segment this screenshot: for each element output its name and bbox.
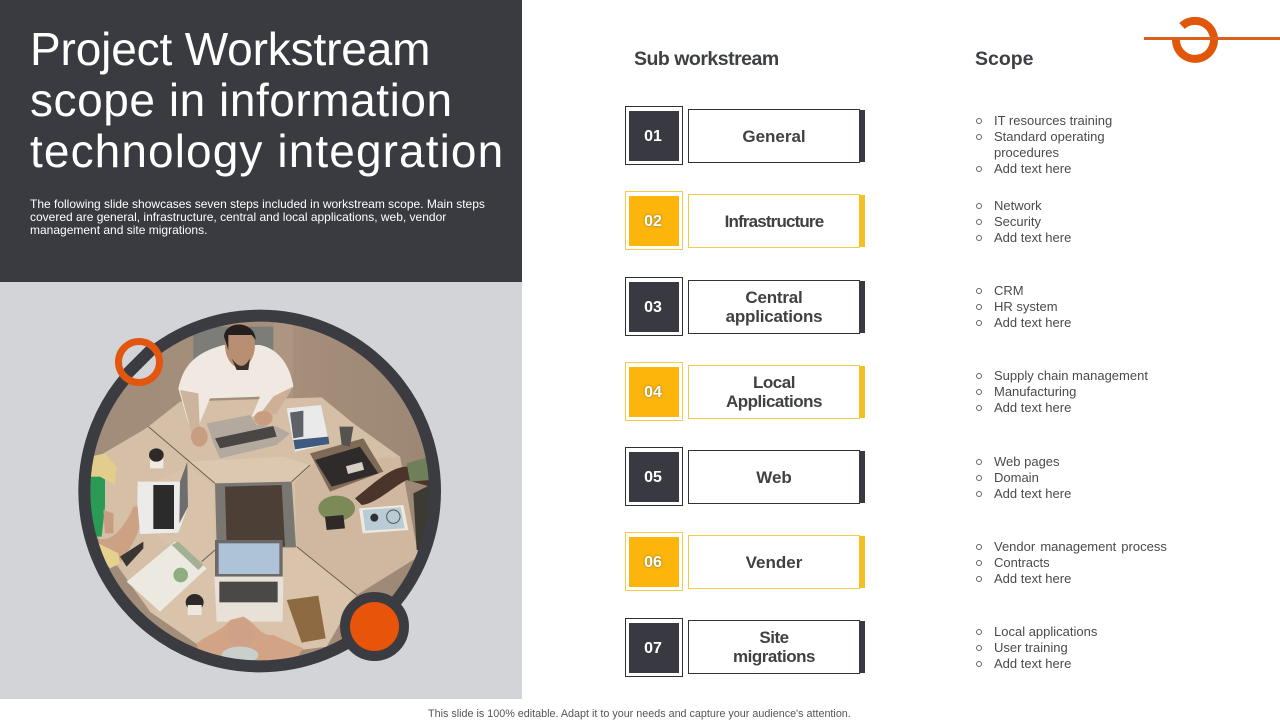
- notebook: [287, 596, 326, 643]
- description text: management and site migrations.: [30, 223, 207, 237]
- plant: [318, 496, 355, 521]
- row 07 scope list: Add text here: [994, 656, 1071, 671]
- center gap: [215, 482, 296, 547]
- row 03 scope list: [976, 283, 1071, 330]
- row 07 number: 07: [644, 640, 662, 657]
- row 01 scope list: IT resources training: [994, 113, 1112, 128]
- row 03 scope list: HR system: [994, 299, 1058, 314]
- row 01 number: [625, 106, 683, 165]
- row 04 scope list: Add text here: [994, 400, 1071, 415]
- row 01 label: [688, 109, 860, 163]
- heading: scope: Scope: [975, 48, 1034, 70]
- row 06 scope list: Contracts: [994, 555, 1050, 570]
- table: [97, 397, 418, 660]
- cup: [150, 457, 164, 468]
- row 02 accent bar: [859, 195, 865, 247]
- row 04 label: Applications: [726, 392, 822, 411]
- row 01 scope list: procedures: [994, 145, 1059, 160]
- row 03 label: applications: [726, 307, 822, 326]
- row 05 scope list: Add text here: [994, 486, 1071, 501]
- row 03 scope list: CRM: [994, 283, 1024, 298]
- wire basket: [310, 438, 383, 492]
- row 06 accent bar: [859, 536, 865, 588]
- row 02 number: 02: [644, 213, 662, 230]
- row 03 accent bar: [859, 281, 865, 333]
- documents: [127, 542, 207, 612]
- row 02 scope list: [976, 198, 1071, 245]
- tablet: [359, 505, 408, 533]
- panel: title panel: [0, 0, 522, 282]
- person right: [355, 466, 429, 505]
- row 03 label: [688, 280, 860, 334]
- row 03 number: 03: [644, 299, 662, 316]
- row 06 number: [625, 532, 683, 591]
- row 04 label: Local: [753, 373, 795, 392]
- row 07 scope list: Local applications: [994, 624, 1097, 639]
- row 06 label: Vender: [746, 552, 802, 572]
- row 04 number: [625, 362, 683, 421]
- row 07 scope list: User training: [994, 640, 1068, 655]
- row 03 number: [625, 277, 683, 336]
- row 06 scope list: Vendor management process: [994, 539, 1167, 554]
- man: [178, 345, 293, 427]
- title: [30, 23, 504, 177]
- row 02 scope list: Network: [994, 198, 1042, 213]
- row 06 number: 06: [644, 554, 662, 571]
- footer note: This slide is 100% editable. Adapt it to your needs and capture your audience's attention.: [428, 708, 851, 720]
- row 07 label: Site: [759, 628, 789, 647]
- panel: photo background: [0, 282, 522, 699]
- row 05 scope list: [976, 454, 1071, 501]
- laptop left: [137, 462, 188, 534]
- title: technology integration: [30, 125, 504, 177]
- row 06 label: [688, 535, 860, 589]
- row 01 number: 01: [644, 128, 662, 145]
- heading: sub workstream: Sub workstream: [634, 48, 779, 70]
- row 04 label: [688, 365, 860, 419]
- description text: [30, 197, 485, 237]
- row 01 scope list: [976, 113, 1112, 176]
- row 05 scope list: Domain: [994, 470, 1039, 485]
- row 02 label: [688, 194, 860, 248]
- row 05 label: [688, 450, 860, 504]
- row 04 accent bar: [859, 366, 865, 418]
- row 01 label: General: [742, 126, 806, 146]
- row 07 scope list: [976, 624, 1097, 671]
- row 01 scope list: Add text here: [994, 161, 1071, 176]
- row 01 accent bar: [859, 110, 865, 162]
- laptop bottom: [215, 540, 283, 577]
- laptop top: [207, 415, 290, 458]
- row 04 scope list: Supply chain management: [994, 368, 1148, 383]
- row 05 accent bar: [859, 451, 865, 503]
- table seams: [148, 427, 357, 595]
- person left: [90, 477, 105, 537]
- row 01 scope list: Standard operating: [994, 129, 1105, 144]
- row 02 scope list: Add text here: [994, 230, 1071, 245]
- row 04 scope list: [976, 368, 1148, 415]
- row 04 number: 04: [644, 384, 662, 401]
- row 04 scope list: Manufacturing: [994, 384, 1076, 399]
- row 07 label: [688, 620, 860, 674]
- row 02 number: [625, 191, 683, 250]
- ring: [84, 316, 435, 666]
- row 05 number: [625, 447, 683, 506]
- description text: covered are general, infrastructure, central and local applications, web, vendor: [30, 210, 446, 224]
- row 07 number: [625, 618, 683, 677]
- row 05 label: Web: [756, 468, 792, 486]
- circular team meeting photo: [78, 310, 441, 672]
- row 03 scope list: Add text here: [994, 315, 1071, 330]
- title: scope in information: [30, 74, 453, 126]
- row 07 accent bar: [859, 621, 865, 673]
- person bottom: [197, 617, 303, 663]
- description text: The following slide showcases seven steps included in workstream scope. Main steps: [30, 197, 485, 211]
- row 03 label: Central: [745, 288, 803, 307]
- icon: orange ring with line: [1144, 16, 1280, 63]
- row 02 label: Infrastructure: [725, 212, 823, 230]
- orange dot accent: [340, 592, 409, 661]
- row 07 label: migrations: [733, 647, 815, 666]
- row 05 number: 05: [644, 469, 662, 486]
- row 02 scope list: Security: [994, 214, 1041, 229]
- title: Project Workstream: [30, 23, 430, 75]
- row 06 scope list: [976, 539, 1167, 586]
- orange ring accent: [115, 338, 163, 386]
- paper: [287, 405, 329, 452]
- row 06 scope list: Add text here: [994, 571, 1071, 586]
- row 05 scope list: Web pages: [994, 454, 1060, 469]
